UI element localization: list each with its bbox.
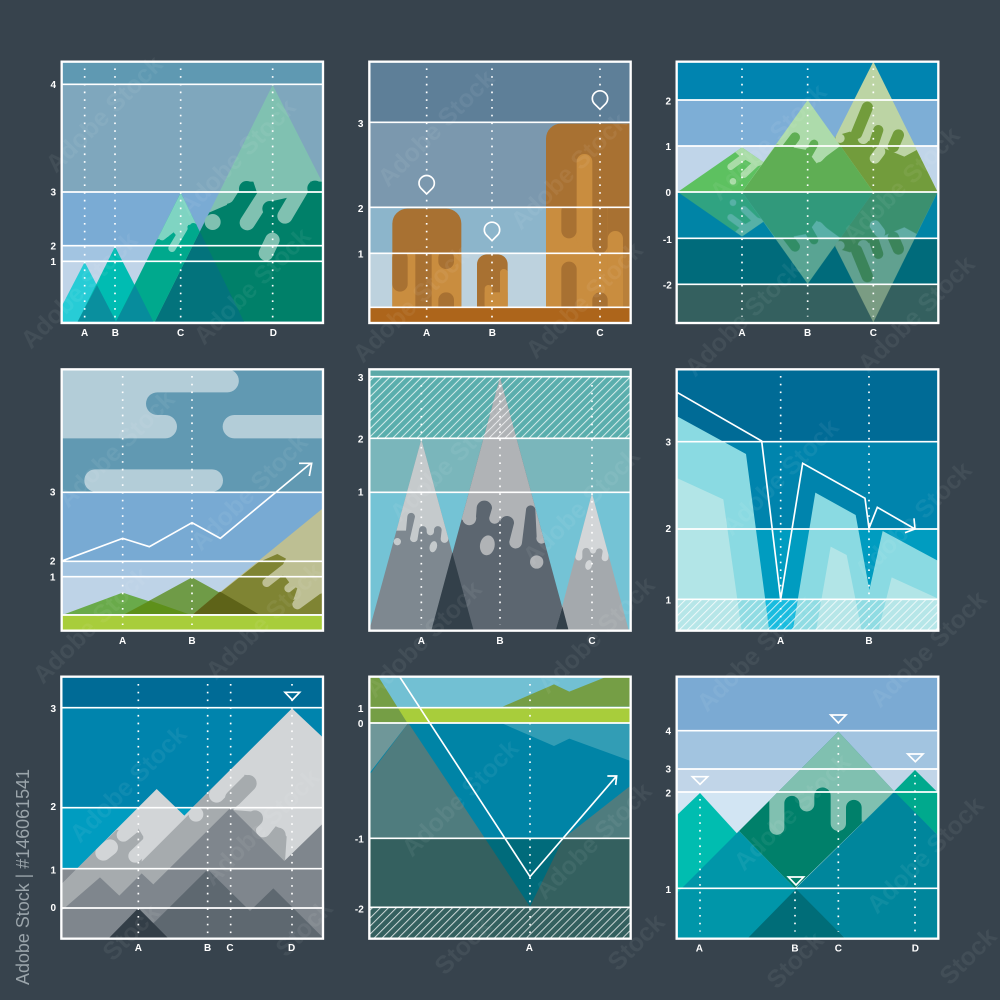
bands (677, 677, 938, 939)
frame (62, 62, 323, 323)
watermark: Adobe Stock (704, 78, 832, 206)
watermark: Adobe Stock (864, 585, 992, 713)
clouds (62, 369, 323, 492)
peak A (370, 440, 452, 630)
axis labels: 1 (666, 596, 672, 607)
watermark: Adobe Stock (52, 385, 180, 513)
stock id text: Adobe Stock | #146061541 (13, 769, 33, 985)
bands (369, 62, 631, 307)
watermark: Adobe Stock (532, 571, 660, 699)
frame (369, 677, 631, 939)
frame (677, 62, 938, 323)
axis labels (358, 373, 596, 647)
dotted guides (742, 68, 873, 317)
dotted guides (138, 684, 292, 933)
grid lines (62, 492, 323, 615)
axis labels: A (526, 943, 533, 954)
watermark: Adobe Stock (372, 64, 500, 192)
frame (677, 677, 938, 939)
column A (392, 209, 461, 316)
watermark: Adobe Stock (852, 250, 980, 378)
axis labels: B (865, 636, 873, 647)
bands (677, 62, 938, 323)
frame (62, 369, 323, 631)
trend arrow (678, 393, 915, 599)
watermark: Stock (761, 926, 829, 994)
axis labels: 3 (358, 119, 364, 130)
hills (65, 507, 323, 615)
axis labels: D (288, 943, 295, 954)
bands (61, 677, 323, 938)
axis labels: C (177, 328, 184, 339)
reflection (677, 191, 940, 324)
bands (369, 677, 631, 939)
axis labels: 2 (666, 96, 672, 107)
watermark: Adobe Stock (679, 254, 807, 382)
axis labels: C (835, 944, 842, 955)
watermark: Adobe Stock (359, 575, 487, 703)
axis labels: A (135, 943, 142, 954)
ground band (369, 307, 631, 323)
watermark: Stock (429, 912, 497, 980)
axis labels (358, 119, 604, 339)
column B (477, 254, 508, 308)
axis labels: C (588, 636, 596, 647)
axis labels: C (596, 328, 604, 339)
axis labels: 1 (51, 865, 57, 876)
axis labels: 1 (666, 885, 672, 896)
hatched band (369, 377, 631, 438)
watermark: Adobe Stock (173, 93, 301, 221)
panel: layered grey ridges (51, 677, 323, 954)
axis labels: 0 (51, 903, 57, 914)
axis labels (51, 80, 277, 339)
axis labels: 1 (51, 257, 57, 268)
axis labels: D (912, 944, 919, 955)
panel: mesa column chart (358, 62, 631, 339)
watermark: Adobe Stock (200, 557, 328, 685)
watermark: Adobe Stock (861, 791, 989, 919)
axis labels: -1 (355, 834, 364, 845)
axis labels: -2 (355, 904, 364, 915)
axis labels: B (204, 943, 211, 954)
watermark: Adobe Stock (691, 589, 819, 717)
grid lines (369, 708, 631, 907)
watermark: Stock (97, 898, 165, 966)
peak B (430, 373, 570, 632)
grid lines (677, 100, 938, 284)
watermark: Adobe Stock (15, 226, 143, 354)
axis labels (50, 487, 196, 647)
axis labels: B (496, 636, 504, 647)
axis labels (355, 704, 533, 954)
axis labels: D (270, 328, 277, 339)
grid lines (677, 442, 938, 599)
panel: snowy peaks (358, 369, 631, 647)
axis labels: 0 (358, 719, 364, 730)
axis labels: C (226, 943, 234, 954)
bands (62, 369, 323, 631)
markers (692, 715, 923, 885)
watermark: Adobe Stock (716, 413, 844, 541)
watermark: Adobe Stock (505, 107, 633, 235)
dotted guides (700, 738, 915, 932)
frame (677, 369, 938, 631)
axis labels: B (112, 328, 119, 339)
axis labels: 1 (666, 142, 672, 153)
watermark: Adobe Stock (188, 222, 316, 350)
axis labels: 4 (51, 80, 57, 91)
watermark: Adobe Stock (384, 399, 512, 527)
axis labels: B (188, 636, 196, 647)
dotted guides (781, 376, 869, 627)
axis labels: 2 (358, 434, 364, 445)
axis labels (51, 704, 295, 954)
grid lines (677, 731, 938, 888)
panel: teal peaks with markers (666, 677, 938, 955)
axis labels: -2 (663, 280, 672, 291)
watermark: Adobe Stock (520, 236, 648, 364)
axis labels: B (489, 328, 496, 339)
watermark: Adobe Stock (185, 428, 313, 556)
trend arrow (400, 677, 617, 877)
axis labels: 1 (358, 250, 364, 261)
watermark: Stock (270, 894, 338, 962)
axis labels: 3 (666, 438, 672, 449)
trend arrow (63, 463, 312, 561)
axis labels: A (423, 328, 430, 339)
frame (369, 62, 631, 323)
watermark: Adobe Stock (517, 442, 645, 570)
watermark: Adobe Stock (529, 777, 657, 905)
frame (369, 369, 631, 631)
watermark: Adobe Stock (347, 240, 475, 368)
mountains (677, 60, 940, 193)
axis labels: 2 (51, 241, 57, 252)
axis labels: A (738, 328, 746, 339)
axis labels: 3 (358, 373, 364, 384)
axis labels: A (119, 636, 126, 647)
watermark: Adobe Stock (64, 720, 192, 848)
pin markers (419, 91, 608, 241)
axis labels: 3 (51, 188, 57, 199)
ridges (60, 708, 322, 938)
hatched band (678, 599, 938, 630)
wave layers (678, 417, 938, 631)
peak C (553, 492, 630, 632)
axis labels: A (696, 944, 703, 955)
dotted guides (85, 68, 273, 322)
grid lines (61, 708, 323, 908)
grid lines (369, 377, 631, 492)
bands (369, 369, 631, 631)
dotted guides (421, 385, 592, 625)
mountains (62, 86, 322, 322)
axis labels (666, 438, 873, 647)
axis labels: 2 (666, 788, 672, 799)
panel: reflected mountains (663, 60, 940, 339)
axis labels: C (870, 328, 877, 339)
overlap shadows (432, 553, 568, 629)
axis labels (663, 96, 877, 339)
bands (677, 369, 938, 631)
axis labels (666, 726, 919, 955)
axis labels: B (791, 944, 799, 955)
axis labels: 2 (666, 524, 672, 535)
snow blobs (205, 214, 272, 253)
axis labels: -1 (663, 235, 672, 246)
panel: falling line chart (666, 369, 938, 647)
watermark: Adobe Stock (849, 456, 977, 584)
grid lines (369, 122, 631, 307)
watermark: Stock (602, 908, 670, 976)
column C (546, 124, 629, 319)
watermark: Adobe Stock (396, 734, 524, 862)
terrain (369, 677, 631, 907)
marker (285, 692, 300, 700)
axis labels: 3 (50, 487, 56, 498)
axis labels: 0 (666, 188, 672, 199)
hatched band (369, 908, 631, 938)
axis labels: 4 (666, 726, 672, 737)
axis labels: 3 (51, 704, 57, 715)
axis labels: B (804, 328, 811, 339)
axis labels: 3 (666, 765, 672, 776)
panel: V-shaped line chart (355, 677, 631, 954)
axis labels: 2 (51, 802, 57, 813)
axis labels: 2 (358, 204, 364, 215)
axis labels: 2 (50, 556, 56, 567)
bands (62, 62, 323, 323)
axis labels: 1 (50, 572, 56, 583)
axis labels: A (777, 636, 784, 647)
frame (61, 677, 323, 939)
watermark: Adobe Stock (728, 748, 856, 876)
dotted guides (427, 68, 600, 322)
axis labels: 1 (358, 487, 364, 498)
watermark: Adobe Stock (197, 763, 325, 891)
axis labels: 1 (358, 704, 364, 715)
grid lines (62, 84, 323, 261)
dotted guides (527, 684, 532, 933)
watermark: Adobe Stock (40, 50, 168, 178)
axis labels: A (81, 328, 88, 339)
watermark: Adobe Stock (837, 121, 965, 249)
axis labels: A (418, 636, 425, 647)
mountains (678, 732, 938, 938)
watermark: Adobe Stock (27, 561, 155, 689)
dotted guides (123, 376, 192, 625)
panel: clouds and rising line (50, 369, 323, 647)
panel: mountain chart 1 (50, 60, 324, 336)
